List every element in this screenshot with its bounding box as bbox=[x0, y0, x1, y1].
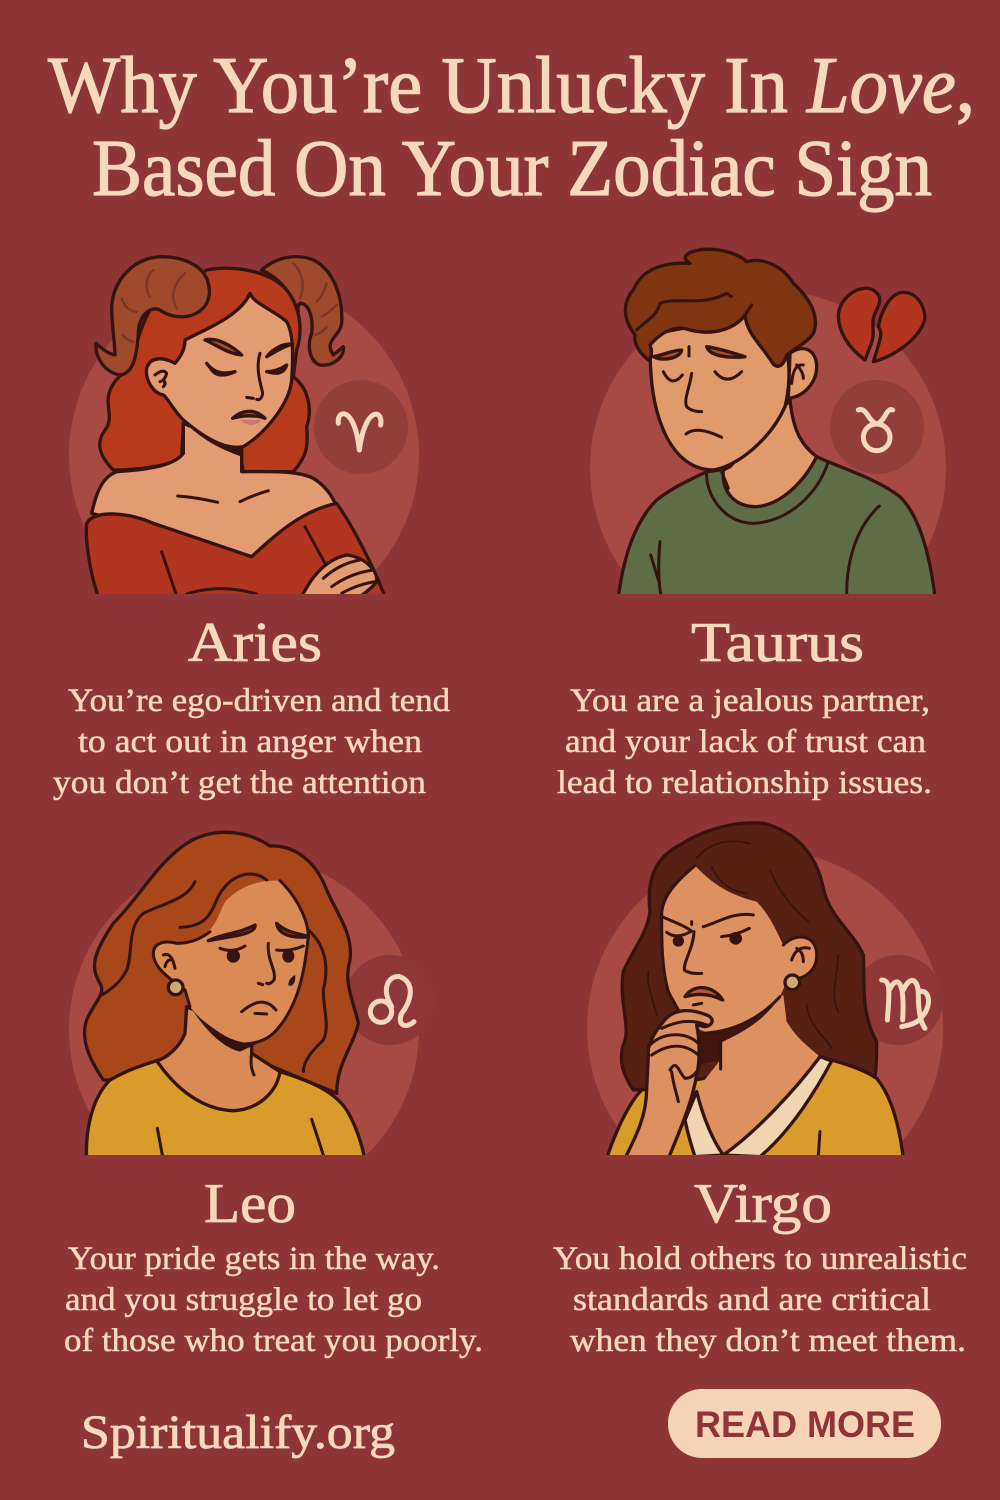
text: Aries description: to act out in anger when bbox=[78, 724, 422, 760]
text: Leo description: and you struggle to let go bbox=[65, 1282, 422, 1318]
text: Taurus description bbox=[557, 683, 932, 801]
title bbox=[48, 42, 975, 213]
text: Virgo description bbox=[553, 1241, 967, 1359]
text: Leo description bbox=[64, 1241, 483, 1359]
icon: taurus glyph bbox=[858, 410, 893, 451]
text: Leo description: Your pride gets in the way. bbox=[68, 1241, 440, 1277]
text: Aries description: you don’t get the attention bbox=[53, 765, 426, 801]
panel: taurus bbox=[557, 249, 946, 801]
text: Taurus description: and your lack of trust can bbox=[565, 724, 926, 760]
illustration: leo woman bbox=[69, 830, 419, 1155]
heading: Taurus: Taurus bbox=[691, 612, 864, 674]
text: Virgo description: standards and are critical bbox=[573, 1282, 931, 1318]
heading: Aries: Aries bbox=[188, 612, 322, 674]
panel: leo bbox=[64, 832, 483, 1359]
title: Based On Your Zodiac Sign bbox=[92, 125, 932, 213]
icon: virgo glyph bbox=[882, 980, 929, 1028]
panel: virgo bbox=[553, 823, 967, 1359]
button: read more: READ MORE bbox=[695, 1404, 915, 1445]
illustration: taurus man bbox=[590, 248, 946, 594]
button: read more bbox=[668, 1389, 941, 1458]
text: Aries description bbox=[53, 683, 451, 801]
heading: Leo: Leo bbox=[204, 1173, 296, 1235]
text: Taurus description: lead to relationship issues. bbox=[557, 765, 932, 801]
illustration: aries woman bbox=[69, 257, 419, 630]
illustration: virgo woman bbox=[587, 821, 943, 1155]
title: Why You’re Unlucky In Love, bbox=[48, 42, 975, 130]
text: Taurus description: You are a jealous partner, bbox=[570, 683, 930, 719]
text: Virgo description: You hold others to unrealistic bbox=[553, 1241, 967, 1277]
icon: aries glyph bbox=[338, 414, 381, 450]
icon: leo glyph bbox=[370, 977, 414, 1025]
heading: Virgo: Virgo bbox=[694, 1173, 832, 1235]
text: Virgo description: when they don’t meet them. bbox=[570, 1323, 966, 1359]
panel: aries bbox=[53, 257, 451, 801]
icon: broken heart bbox=[838, 288, 925, 362]
text: Leo description: of those who treat you poorly. bbox=[64, 1323, 483, 1359]
footer: site name: Spiritualify.org bbox=[81, 1406, 395, 1459]
text: Aries description: You’re ego-driven and tend bbox=[68, 683, 451, 719]
